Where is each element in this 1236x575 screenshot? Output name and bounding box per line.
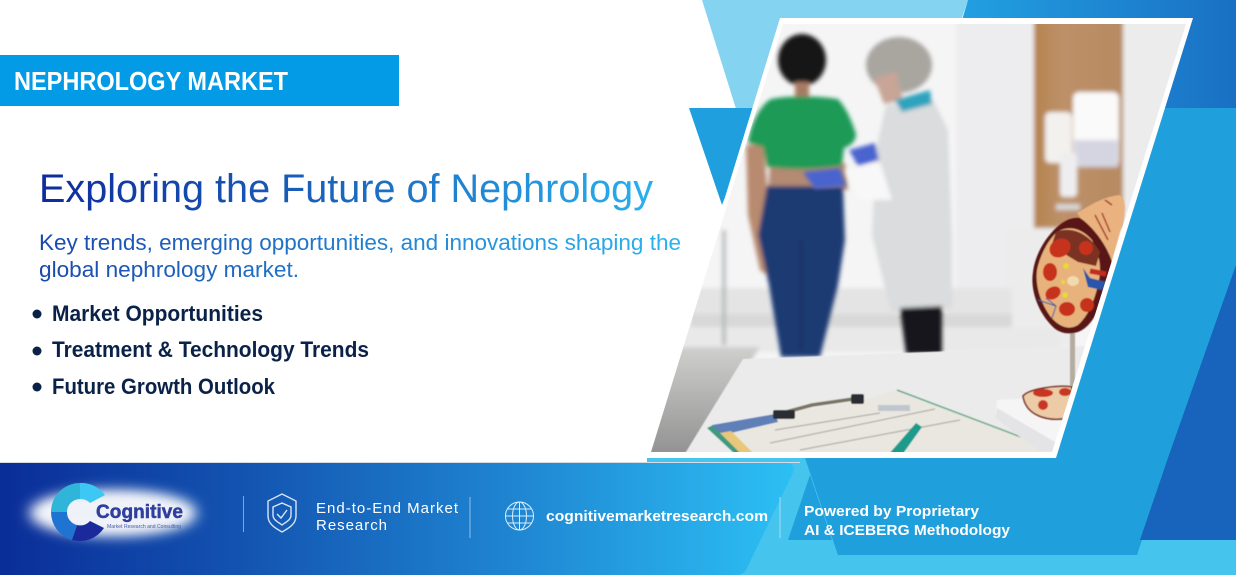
feature: powered by proprietary methodology: Powered by Proprietary <box>804 504 979 520</box>
feature: end-to-end market research <box>316 500 459 534</box>
divider <box>780 497 781 538</box>
logo: Cognitive: Market Research and Consulting <box>107 524 181 530</box>
table and clipboard <box>681 346 1085 460</box>
feature: powered by proprietary methodology <box>804 504 1010 539</box>
subheading text <box>39 230 681 282</box>
bullet list: Treatment & Technology Trends <box>52 337 369 362</box>
header banner: market title: NEPHROLOGY MARKET <box>14 66 288 96</box>
divider <box>470 497 471 538</box>
logo: Cognitive <box>29 483 197 541</box>
feature: powered by proprietary methodology: AI & ICEBERG Methodology <box>804 523 1010 539</box>
bullet list <box>32 301 369 399</box>
feature: end-to-end market research: Research <box>316 517 387 534</box>
bullet list: Future Growth Outlook <box>52 374 276 399</box>
bullet list: Market Opportunities <box>52 301 263 326</box>
header banner: market title <box>0 55 399 106</box>
patient figure <box>746 34 856 357</box>
website url: cognitivemarketresearch.com <box>546 508 768 525</box>
kidney model <box>1023 195 1125 419</box>
icon: globe <box>506 502 534 530</box>
subheading text: global nephrology market. <box>39 257 299 282</box>
background geometric shapes <box>647 0 1236 575</box>
logo: Cognitive: Cognitive <box>96 502 183 523</box>
photo: doctor examining patient with kidney model <box>640 18 1200 460</box>
subheading text: Key trends, emerging opportunities, and innovations shaping the <box>39 230 681 255</box>
photo background wall <box>640 20 1200 460</box>
divider <box>243 496 244 532</box>
feature: end-to-end market research: End-to-End Market <box>316 500 459 517</box>
doctor figure <box>803 37 952 354</box>
main heading: Exploring the Future of Nephrology <box>39 167 653 211</box>
footer bar <box>0 462 800 575</box>
icon: shield with check <box>268 494 296 532</box>
